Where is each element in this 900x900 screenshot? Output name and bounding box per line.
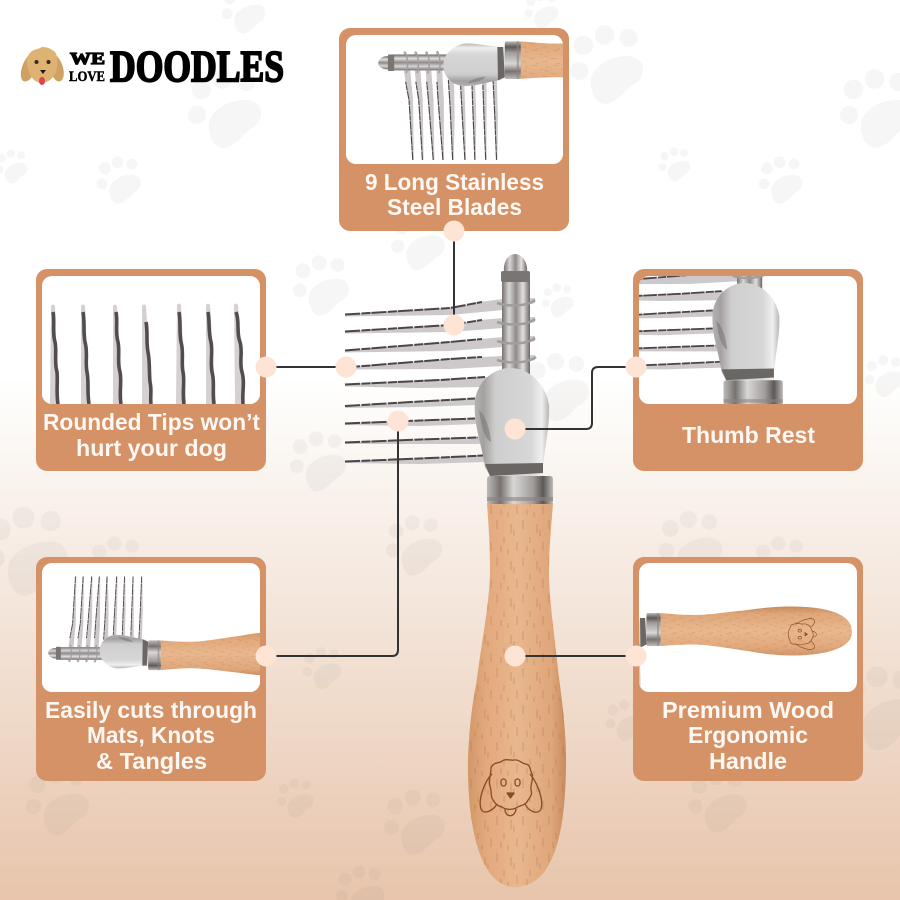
connector lines: [266, 231, 636, 656]
logo: We Love Doodles: [21, 42, 284, 91]
panel: rounded tips: [36, 269, 266, 471]
panel: easily cuts through mats: Easily cuts through: [45, 697, 257, 723]
panel: thumb rest: [408, 269, 863, 471]
panel: thumb rest: Thumb Rest: [682, 422, 815, 448]
photo: comb with blades hanging: [378, 41, 563, 160]
photo: comb with blades pointing up: [48, 576, 333, 676]
photo: blade tips: [50, 304, 245, 404]
panel: 9 long stainless steel blades: [339, 28, 739, 231]
panel: easily cuts through mats: Mats, Knots: [87, 722, 215, 748]
panel: 9 long stainless steel blades: Steel Blades: [387, 194, 522, 220]
panel: premium wood handle: Handle: [709, 748, 787, 774]
panel: rounded tips: Rounded Tips won’t: [43, 409, 260, 435]
photo: wooden handle: [536, 606, 852, 717]
panel: rounded tips: hurt your dog: [76, 435, 227, 461]
photo: thumb plate close-up: [596, 180, 795, 750]
panel: premium wood handle: Ergonomic: [688, 722, 808, 748]
logo: We Love Doodles: LOVE: [69, 69, 105, 85]
icon: dog head: [21, 47, 64, 85]
panel: premium wood handle: [633, 557, 863, 781]
logo: We Love Doodles: DOODLES: [110, 42, 284, 91]
callout dots: [256, 220, 646, 666]
panel: 9 long stainless steel blades: 9 Long Stainless: [365, 169, 544, 195]
panel: easily cuts through mats: [36, 557, 333, 781]
panel: easily cuts through mats: & Tangles: [96, 748, 207, 774]
logo: We Love Doodles: WE: [70, 49, 105, 68]
main product: dematting comb: [345, 254, 566, 887]
panel: premium wood handle: Premium Wood: [662, 697, 834, 723]
